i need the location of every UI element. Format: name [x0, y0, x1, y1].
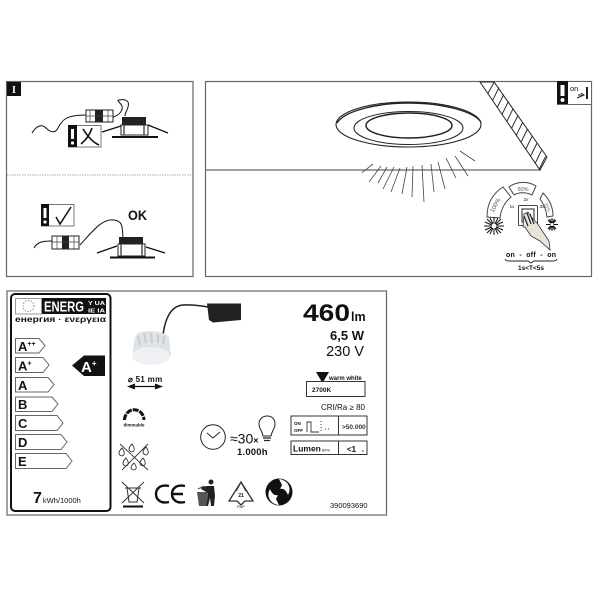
class E [16, 454, 72, 469]
icon: dimmable: dimmable [123, 422, 145, 428]
icon: bulb [259, 416, 275, 440]
icon: warning check [41, 204, 74, 226]
wattage: 6,5 W [330, 328, 365, 343]
class A [16, 378, 54, 393]
panel: dimming instructions [205, 81, 592, 276]
switching cycles box: >50.000 [342, 424, 366, 431]
class B [16, 397, 58, 412]
class A++: A [18, 339, 27, 354]
badge: step I [7, 82, 21, 96]
class D: D [18, 435, 27, 450]
dimmer diagram: 1x [510, 204, 515, 209]
CE mark [156, 486, 185, 502]
on off on: on - off - on [506, 252, 556, 259]
100% segment: 100% [490, 197, 503, 214]
class A+: A [18, 358, 27, 374]
icon: WEEE bin [122, 482, 144, 506]
dimmer diagram: 2x [524, 197, 529, 202]
lifetime text [230, 430, 268, 458]
downlight rings [336, 102, 481, 147]
class C: C [18, 416, 28, 431]
icon: dimmable [123, 410, 145, 428]
class D [16, 434, 67, 450]
ENERG heading: IE IA [88, 308, 105, 314]
dimmer diagram: 1s<T<5s [518, 265, 544, 272]
class A+ [16, 358, 49, 374]
diameter: ⌀ 51 mm [128, 375, 162, 384]
energy subtitle: енергия · ενεργεια [15, 314, 107, 324]
colour temperature [306, 372, 365, 396]
diagram: correct wiring [34, 220, 165, 258]
class B: B [18, 397, 27, 412]
CRI: CRI/Ra ≥ 80 [321, 403, 366, 412]
badge: step I: I [12, 85, 16, 96]
light rays [362, 151, 475, 202]
icon: recycling triangle [229, 482, 253, 509]
energy consumption: 7kWh/1000h [33, 490, 81, 507]
luminous flux: 460 [303, 300, 350, 327]
icon: tidyman [197, 480, 215, 506]
class E: E [18, 454, 27, 469]
dimmer diagram: 3x [540, 204, 545, 209]
article number: 390093690 [330, 501, 368, 510]
lumen maintenance box: <1 [347, 445, 357, 454]
25% segment: 25% [543, 202, 552, 213]
icon: no water [119, 444, 148, 470]
voltage: 230 V [326, 344, 364, 360]
lifetime text: ≈30× [230, 430, 259, 446]
luminous flux: lm [351, 310, 366, 324]
icon: clock [201, 425, 225, 449]
diameter [127, 375, 163, 390]
lumen maintenance box: s [362, 448, 364, 453]
icon: recycling triangle: 21 [238, 493, 244, 499]
hand [523, 212, 550, 250]
switching cycles box: OFF [294, 428, 303, 433]
colour temperature: warm white [328, 376, 362, 382]
class A: A [18, 378, 28, 393]
button [518, 206, 538, 226]
product photo [132, 304, 241, 365]
energy label [11, 294, 110, 511]
rating arrow A+ [72, 356, 105, 376]
luminous flux [303, 300, 366, 327]
class A+: + [27, 360, 31, 368]
class C [16, 416, 63, 431]
icon: warning on switch [557, 81, 592, 104]
switching cycles box: ON [294, 421, 301, 426]
icon: warning cross [68, 125, 101, 147]
rating arrow A+: A [81, 359, 92, 376]
panel: product data [7, 291, 386, 515]
ENERG heading: Y UA [88, 301, 105, 307]
EU flag [16, 298, 42, 314]
icon: recycling triangle: PAP [237, 504, 245, 509]
panel: installation wiring [6, 82, 193, 276]
lifetime text: 1.000h [237, 447, 268, 458]
dimmer diagram [484, 182, 558, 272]
switching cycles box [291, 416, 367, 435]
class A++ [16, 338, 45, 354]
diagram: incorrect wiring [32, 100, 168, 137]
label: OK: OK [128, 207, 147, 223]
lumen maintenance box [291, 441, 367, 454]
icon: warning on switch: on [570, 84, 578, 93]
hatched wall section [480, 82, 547, 170]
ENERG heading: ENERG [44, 300, 84, 316]
colour temperature: 2700K [312, 387, 331, 394]
starburst bright [484, 217, 504, 235]
class A++: ++ [27, 341, 36, 348]
50% segment: 50% [517, 187, 529, 193]
rating arrow A+: + [92, 359, 97, 368]
lumen maintenance box: Lumen60% [293, 444, 330, 454]
starburst dim [546, 218, 558, 231]
icon: green dot [266, 478, 292, 506]
